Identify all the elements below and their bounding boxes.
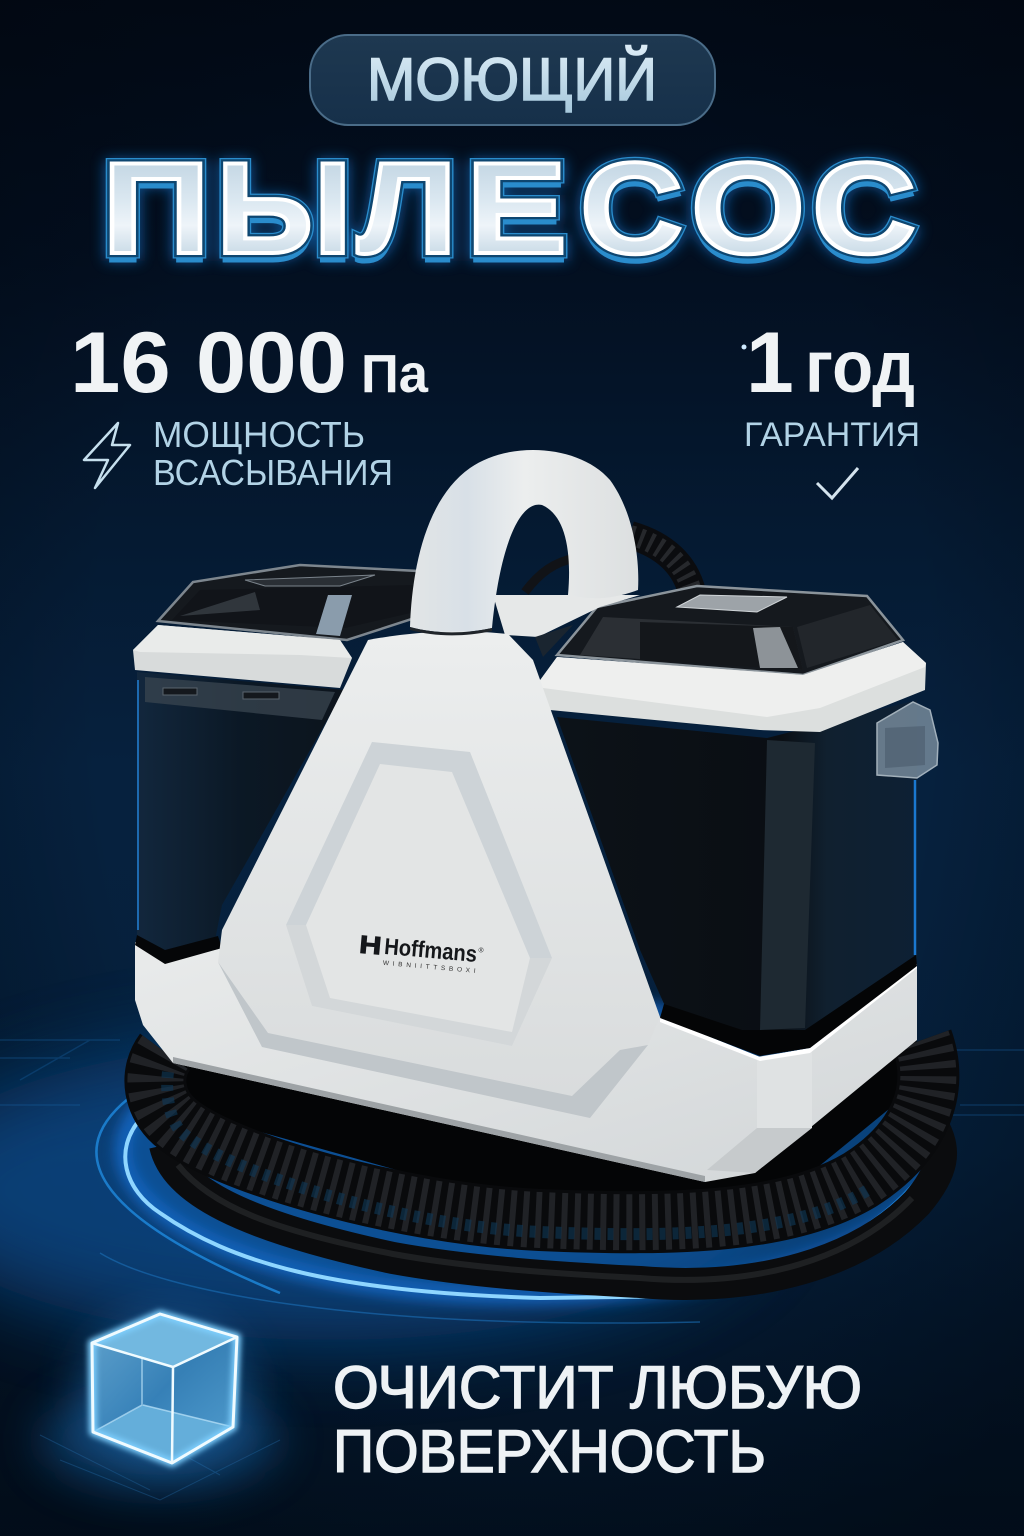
value: 1 год: 1 xyxy=(746,315,794,411)
main title: ПЫЛЕСОС: П xyxy=(102,135,210,281)
rear hoses xyxy=(525,535,692,592)
underside shadow xyxy=(160,1040,917,1210)
panel bevel bottom xyxy=(218,962,648,1118)
main title: ПЫЛЕСОС: Е xyxy=(466,135,567,281)
carry handle xyxy=(410,450,638,632)
tagline: ОЧИСТИТ ЛЮБУЮ xyxy=(333,1354,862,1421)
main title: ПЫЛЕСОС: П xyxy=(102,137,210,283)
main title: ПЫЛЕСОС: С xyxy=(812,137,916,283)
brand logo: WIBNIITTSBOXI xyxy=(383,960,476,975)
dark wedge xyxy=(535,625,573,657)
main title: ПЫЛЕСОС: П xyxy=(102,135,210,281)
main title: ПЫЛЕСОС: С xyxy=(812,135,916,281)
main title: ПЫЛЕСОС: Е xyxy=(466,142,567,288)
main title: ПЫЛЕСОС: О xyxy=(691,137,805,283)
main title: ПЫЛЕСОС: Е xyxy=(466,135,567,281)
inner plate xyxy=(286,742,552,1046)
lower body facets xyxy=(173,964,917,1182)
main title: ПЫЛЕСОС: О xyxy=(691,135,805,281)
floor glow rings xyxy=(96,1002,934,1323)
main title: ПЫЛЕСОС: Л xyxy=(357,137,457,283)
right cap glass xyxy=(557,586,903,675)
main title: ПЫЛЕСОС: Л xyxy=(357,135,457,281)
value: 16 000 Па: Па xyxy=(361,344,429,404)
main title: ПЫЛЕСОС: О xyxy=(691,142,805,288)
ribbed hose coil xyxy=(155,1040,928,1234)
main title: ПЫЛЕСОС: Ы xyxy=(216,135,352,281)
label: suction: МОЩНОСТЬ xyxy=(153,414,365,455)
main title: ПЫЛЕСОС: Ы xyxy=(216,135,352,281)
main title: ПЫЛЕСОС xyxy=(102,135,916,288)
main title: ПЫЛЕСОС: Е xyxy=(466,135,567,281)
main title: ПЫЛЕСОС: С xyxy=(812,135,916,281)
main title: ПЫЛЕСОС: Е xyxy=(466,137,567,283)
lower body shell xyxy=(135,942,917,1182)
rear deck xyxy=(493,595,640,637)
icon: check mark xyxy=(817,468,858,498)
brand logo xyxy=(358,931,485,976)
sparkle xyxy=(742,344,746,350)
main title: ПЫЛЕСОС: С xyxy=(580,135,683,281)
value: 16 000 Па: 16 000 xyxy=(70,315,347,411)
value: 1 год xyxy=(746,315,915,411)
main title: ПЫЛЕСОС: С xyxy=(812,142,916,288)
panel collar xyxy=(410,627,492,635)
value: 1 год: год xyxy=(805,325,915,408)
pill heading: МОЮЩИЙ xyxy=(310,35,715,125)
main title: ПЫЛЕСОС: П xyxy=(102,135,210,281)
main title: ПЫЛЕСОС: Л xyxy=(357,135,457,281)
main title: ПЫЛЕСОС: Л xyxy=(357,135,457,281)
left cap glass xyxy=(158,565,418,640)
center triangular panel xyxy=(218,627,660,1118)
inner plate bevel xyxy=(286,742,552,958)
pill heading: МОЮЩИЙ: МОЮЩИЙ xyxy=(367,46,657,113)
main title: ПЫЛЕСОС: С xyxy=(580,142,683,288)
main title: ПЫЛЕСОС: С xyxy=(580,135,683,281)
spout xyxy=(877,702,938,778)
left cap shell xyxy=(133,625,352,688)
icon: lightning bolt xyxy=(84,423,130,488)
main title: ПЫЛЕСОС: Л xyxy=(357,142,457,288)
right tank xyxy=(557,700,917,1056)
label: suction: ВСАСЫВАНИЯ xyxy=(153,452,393,493)
label: warranty: ГАРАНТИЯ xyxy=(744,416,920,454)
stat: suction power xyxy=(70,315,429,493)
lower smooth hose xyxy=(165,1130,941,1284)
main title: ПЫЛЕСОС: С xyxy=(812,135,916,281)
brand logo: Hoffmans xyxy=(383,933,478,967)
left tank xyxy=(135,672,345,964)
main title: ПЫЛЕСОС: О xyxy=(691,135,805,281)
icon: glowing ice cube xyxy=(40,1314,280,1500)
main title: ПЫЛЕСОС: Ы xyxy=(216,142,352,288)
main title: ПЫЛЕСОС: П xyxy=(102,142,210,288)
main title: ПЫЛЕСОС: Ы xyxy=(216,137,352,283)
main title: ПЫЛЕСОС: С xyxy=(580,137,683,283)
brand logo: ® xyxy=(478,946,485,955)
product: vacuum cleaner xyxy=(133,450,941,1284)
main title: ПЫЛЕСОС: Ы xyxy=(216,135,352,281)
brand logo: H xyxy=(358,931,383,961)
main title: ПЫЛЕСОС: С xyxy=(580,135,683,281)
tagline: ПОВЕРХНОСТЬ xyxy=(333,1418,766,1485)
stat: warranty xyxy=(742,315,920,498)
main title: ПЫЛЕСОС: О xyxy=(691,135,805,281)
right cap shell xyxy=(538,642,926,732)
